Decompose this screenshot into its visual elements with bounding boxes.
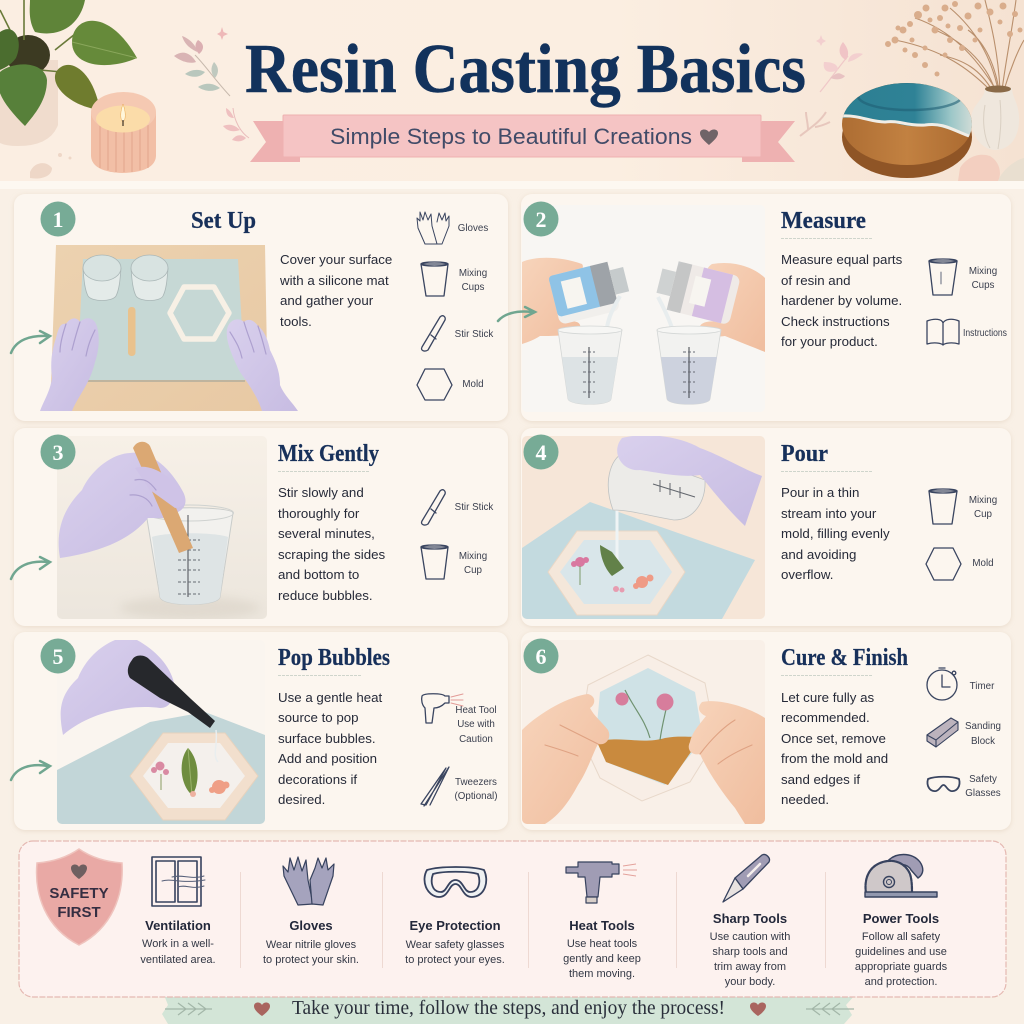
- description: stream into your: [781, 506, 877, 521]
- item: gloves: Wear nitrile gloves: [266, 939, 357, 951]
- icon: stir stick: [422, 490, 445, 525]
- item: power tools: Power Tools: [863, 911, 939, 926]
- tools list: Mixing: [459, 268, 487, 279]
- description: of resin and: [781, 273, 850, 288]
- description: Pour in a thin: [781, 485, 859, 500]
- heading: pop bubbles: Pop Bubbles: [278, 645, 390, 671]
- panel: step 6 cure and finish: [521, 632, 1011, 830]
- panel: step 4 pour: [521, 428, 1011, 626]
- step number 1: [40, 202, 76, 236]
- description: from the mold and: [781, 751, 888, 766]
- step number 5: [40, 638, 76, 674]
- step number 3: [40, 434, 76, 470]
- closing message: Take your time, follow the steps, and enjoy the process!: [292, 998, 725, 1019]
- tools list: [927, 668, 1001, 799]
- tools list: Sanding: [965, 721, 1001, 732]
- step number 3: 3: [52, 440, 64, 465]
- item: heat tools: them moving.: [569, 968, 635, 980]
- description: scraping the sides: [278, 547, 386, 562]
- description: mold, filling evenly: [781, 526, 890, 541]
- description: Once set, remove: [781, 731, 886, 746]
- icon: hexagon mold: [926, 548, 961, 580]
- tools list: Cup: [464, 565, 483, 576]
- tools list: Gloves: [458, 223, 488, 234]
- vase: [971, 86, 1019, 150]
- tools list: Stir Stick: [455, 329, 493, 340]
- description: Use a gentle heat: [278, 690, 383, 705]
- tools list: [421, 490, 493, 579]
- item: power tools: appropriate guards: [855, 961, 948, 973]
- icon: heat gun: [566, 862, 619, 903]
- description: Let cure fully as: [781, 690, 874, 705]
- icon: instructions book: [927, 319, 959, 345]
- tools list: Block: [971, 736, 995, 747]
- photo: mat with cups, mold and gloved hands: [40, 245, 298, 411]
- tools list: Stir Stick: [455, 502, 493, 513]
- heading: mix gently: Mix Gently: [278, 441, 379, 467]
- icon: mixing cup: [929, 489, 957, 524]
- tools list: Cups: [462, 282, 485, 293]
- arrow into step 1: [11, 331, 50, 353]
- potted plant: [0, 0, 137, 146]
- tools list: Heat Tool: [455, 705, 497, 716]
- dried flowers: [885, 0, 1024, 90]
- photo: pouring into the mold: [522, 435, 765, 619]
- icon: gloves: [417, 212, 449, 244]
- tools list: Instructions: [963, 328, 1007, 339]
- description: needed.: [781, 792, 829, 807]
- photo: hands removing resin piece from mold: [522, 640, 765, 824]
- description: desired.: [278, 792, 325, 807]
- tools list: (Optional): [454, 791, 498, 802]
- tools list: Caution: [459, 734, 493, 745]
- step number 6: [524, 638, 558, 674]
- description: decorations if: [278, 772, 357, 787]
- tools list: Timer: [970, 681, 995, 692]
- title: Resin Casting Basics: [245, 31, 806, 108]
- step number 4: 4: [536, 440, 546, 465]
- subtitle ribbon: Simple Steps to Beautiful Creations: [330, 124, 692, 149]
- item: ventilation: Work in a well-: [142, 938, 214, 950]
- item: sharp tools: Use caution with: [710, 931, 790, 943]
- stone: [958, 155, 1024, 181]
- description: Cover your surface: [280, 252, 392, 267]
- description: Add and position: [278, 751, 377, 766]
- candle: [91, 92, 156, 173]
- badge: safety first shield: FIRST: [57, 904, 101, 921]
- description: with a silicone mat: [279, 273, 389, 288]
- arrow into step 5: [11, 761, 50, 780]
- heading: pour: [781, 441, 872, 472]
- item: eye protection: [405, 867, 505, 966]
- description: source to pop: [278, 710, 359, 725]
- item: power tools: and protection.: [865, 976, 937, 988]
- description: tools.: [280, 314, 312, 329]
- step number 4: [524, 434, 558, 470]
- heading: measure: Measure: [781, 208, 866, 234]
- item: heat tools: [563, 862, 641, 980]
- tools list: Mold: [462, 379, 484, 390]
- description: surface bubbles.: [278, 731, 376, 746]
- item: heat tools: gently and keep: [563, 953, 641, 965]
- right sprig icon: [806, 1003, 854, 1015]
- icon: circular saw: [865, 854, 937, 897]
- left floral sprig: [174, 27, 249, 141]
- heading: cure and finish: Cure & Finish: [781, 645, 908, 671]
- badge: safety first shield: [37, 849, 122, 945]
- description: and bottom to: [278, 567, 359, 582]
- item: eye protection: Wear safety glasses: [406, 939, 505, 951]
- description: Check instructions: [781, 314, 890, 329]
- header banner: [0, 0, 1024, 189]
- item: ventilation: Ventilation: [145, 918, 211, 933]
- icon: goggles: [424, 867, 486, 897]
- icon: safety glasses: [927, 777, 960, 791]
- item: sharp tools: [710, 855, 790, 988]
- tools list: Cup: [974, 509, 993, 520]
- step number 5: 5: [52, 644, 64, 669]
- icon: gloves: [283, 857, 334, 905]
- left sprig icon: [165, 1003, 212, 1015]
- arrow into step 3: [11, 557, 50, 579]
- item: power tools: guidelines and use: [855, 946, 947, 958]
- item: eye protection: Eye Protection: [409, 918, 501, 933]
- item: heat tools: Heat Tools: [569, 918, 635, 933]
- tools list: [926, 489, 997, 580]
- resin tray: [842, 83, 972, 178]
- panel: step 5 pop bubbles: [14, 632, 508, 830]
- item: eye protection: to protect your eyes.: [405, 954, 505, 966]
- right floral sprig: [800, 35, 863, 136]
- description: Measure equal parts: [781, 252, 903, 267]
- item: sharp tools: your body.: [725, 976, 775, 988]
- description: hardener by volume.: [781, 293, 902, 308]
- tools list: Mixing: [459, 551, 487, 562]
- description: reduce bubbles.: [278, 588, 373, 603]
- icon: mixing cups: [421, 262, 448, 296]
- panel: step 3 mix gently: [14, 428, 508, 626]
- item: gloves: [263, 857, 359, 966]
- tools list: Mixing: [969, 495, 997, 506]
- item: power tools: Follow all safety: [862, 931, 941, 943]
- icon: utility knife: [723, 855, 769, 902]
- tools list: [927, 259, 1007, 345]
- description: several minutes,: [278, 526, 375, 541]
- heading: pour: Pour: [781, 441, 828, 467]
- description: thoroughly for: [278, 506, 360, 521]
- badge: safety first shield: SAFETY: [49, 885, 109, 902]
- step number 6: 6: [536, 644, 546, 669]
- item: sharp tools: sharp tools and: [712, 946, 788, 958]
- icon: mixing cup: [421, 545, 448, 579]
- tools list: Mixing: [969, 266, 997, 277]
- icon: sanding block: [927, 718, 958, 747]
- photo: pouring resin and hardener: [522, 258, 765, 405]
- panel: step 1 set up: [14, 194, 508, 421]
- step number 2: 2: [536, 207, 546, 232]
- description: overflow.: [781, 567, 833, 582]
- tools list: Use with: [457, 719, 495, 730]
- description: recommended.: [781, 710, 870, 725]
- icon: tweezers: [421, 767, 449, 806]
- description: for your product.: [781, 334, 878, 349]
- item: ventilation: [140, 857, 216, 966]
- arrow from step 1: [498, 307, 535, 321]
- description: and avoiding: [781, 547, 856, 562]
- footer banner: [162, 995, 855, 1024]
- heading: set up: Set Up: [191, 208, 256, 234]
- tools list: Cups: [972, 280, 995, 291]
- panel: step 2 measure: [498, 194, 1011, 421]
- description: and gather your: [280, 293, 374, 308]
- description: sand edges if: [781, 772, 860, 787]
- icon: timer: [927, 668, 957, 700]
- item: ventilation: ventilated area.: [140, 954, 216, 966]
- photo: stirring in a cup: [57, 436, 267, 620]
- photo: heat tool over mold: [57, 640, 265, 824]
- tools list: [417, 212, 493, 400]
- tools list: Mold: [972, 558, 994, 569]
- tools list: Safety: [969, 774, 997, 785]
- icon: hexagon mold: [417, 369, 452, 400]
- panel: safety first: [19, 841, 1006, 997]
- right heart icon: [750, 1002, 766, 1016]
- item: sharp tools: trim away from: [714, 961, 786, 973]
- step number 2: [524, 202, 558, 236]
- item: gloves: Gloves: [289, 918, 333, 933]
- icon: mixing cups: [929, 259, 957, 295]
- subtitle ribbon: [250, 115, 795, 162]
- tools list: Glasses: [965, 788, 1001, 799]
- tools list: Tweezers: [455, 777, 497, 788]
- description: Stir slowly and: [278, 485, 364, 500]
- left heart icon: [254, 1002, 270, 1016]
- tools list: [421, 694, 498, 806]
- shell specks: [30, 153, 72, 179]
- step number 1: 1: [52, 207, 64, 232]
- item: heat tools: Use heat tools: [567, 938, 638, 950]
- icon: window with airflow: [152, 857, 205, 906]
- icon: stir stick: [422, 316, 445, 351]
- item: power tools: [855, 854, 948, 988]
- icon: heat tool: [422, 694, 463, 723]
- item: sharp tools: Sharp Tools: [713, 911, 787, 926]
- item: gloves: to protect your skin.: [263, 954, 359, 966]
